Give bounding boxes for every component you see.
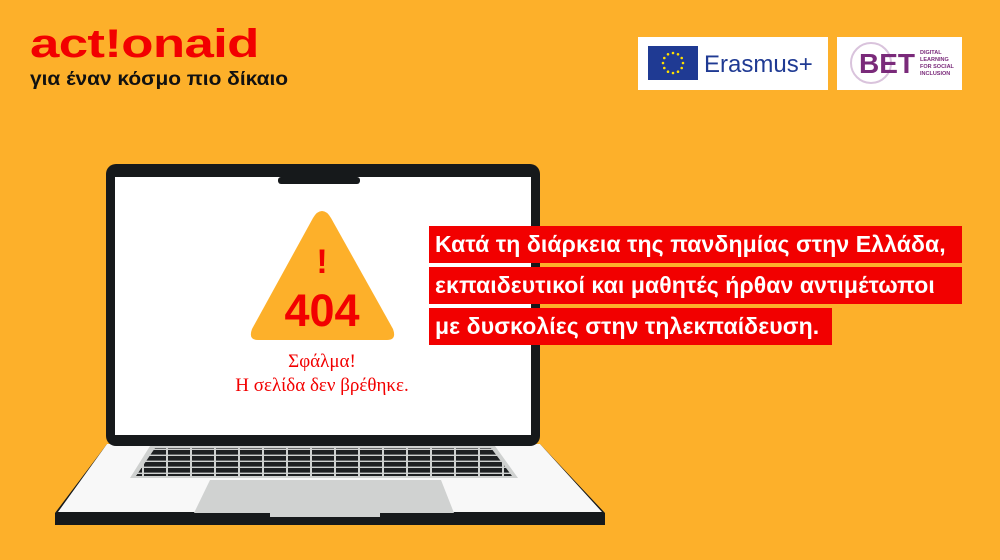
error message: Σφάλμα! (288, 351, 356, 372)
callout: headline text: Κατά τη διάρκεια της πανδημίας στην Ελλάδα, (435, 231, 946, 257)
logo: BET: FOR SOCIAL (920, 64, 955, 70)
icon: warning triangle 404: 404 (284, 285, 360, 336)
logo: BET: INCLUSION (920, 71, 950, 77)
icon: warning triangle 404: ! (316, 243, 328, 281)
laptop screen bezel (106, 164, 540, 446)
trackpad (194, 480, 454, 513)
tagline: για έναν κόσμο πιο δίκαιο (30, 69, 288, 90)
logo: BET: DIGITAL (920, 50, 942, 56)
logo: actionaid (30, 22, 288, 90)
wordmark: act!onaid (30, 22, 259, 66)
icon: EU flag (648, 46, 698, 80)
logo: Erasmus+ (638, 37, 828, 90)
keyboard (130, 446, 518, 478)
error message: Η σελίδα δεν βρέθηκε. (235, 375, 409, 396)
logo: BET: BET (859, 48, 915, 79)
callout: headline text: με δυσκολίες στην τηλεκπαίδευση. (435, 313, 819, 339)
text: Erasmus+: Erasmus+ (704, 51, 813, 78)
callout: headline text: εκπαιδευτικοί και μαθητές ήρθαν αντιμέτωποι (435, 272, 935, 298)
error message (235, 351, 409, 396)
callout: headline text (429, 226, 962, 345)
logo: BET: LEARNING (920, 57, 949, 63)
laptop base (55, 444, 605, 525)
logo: BET (837, 37, 962, 90)
icon: warning triangle 404 (251, 211, 394, 340)
